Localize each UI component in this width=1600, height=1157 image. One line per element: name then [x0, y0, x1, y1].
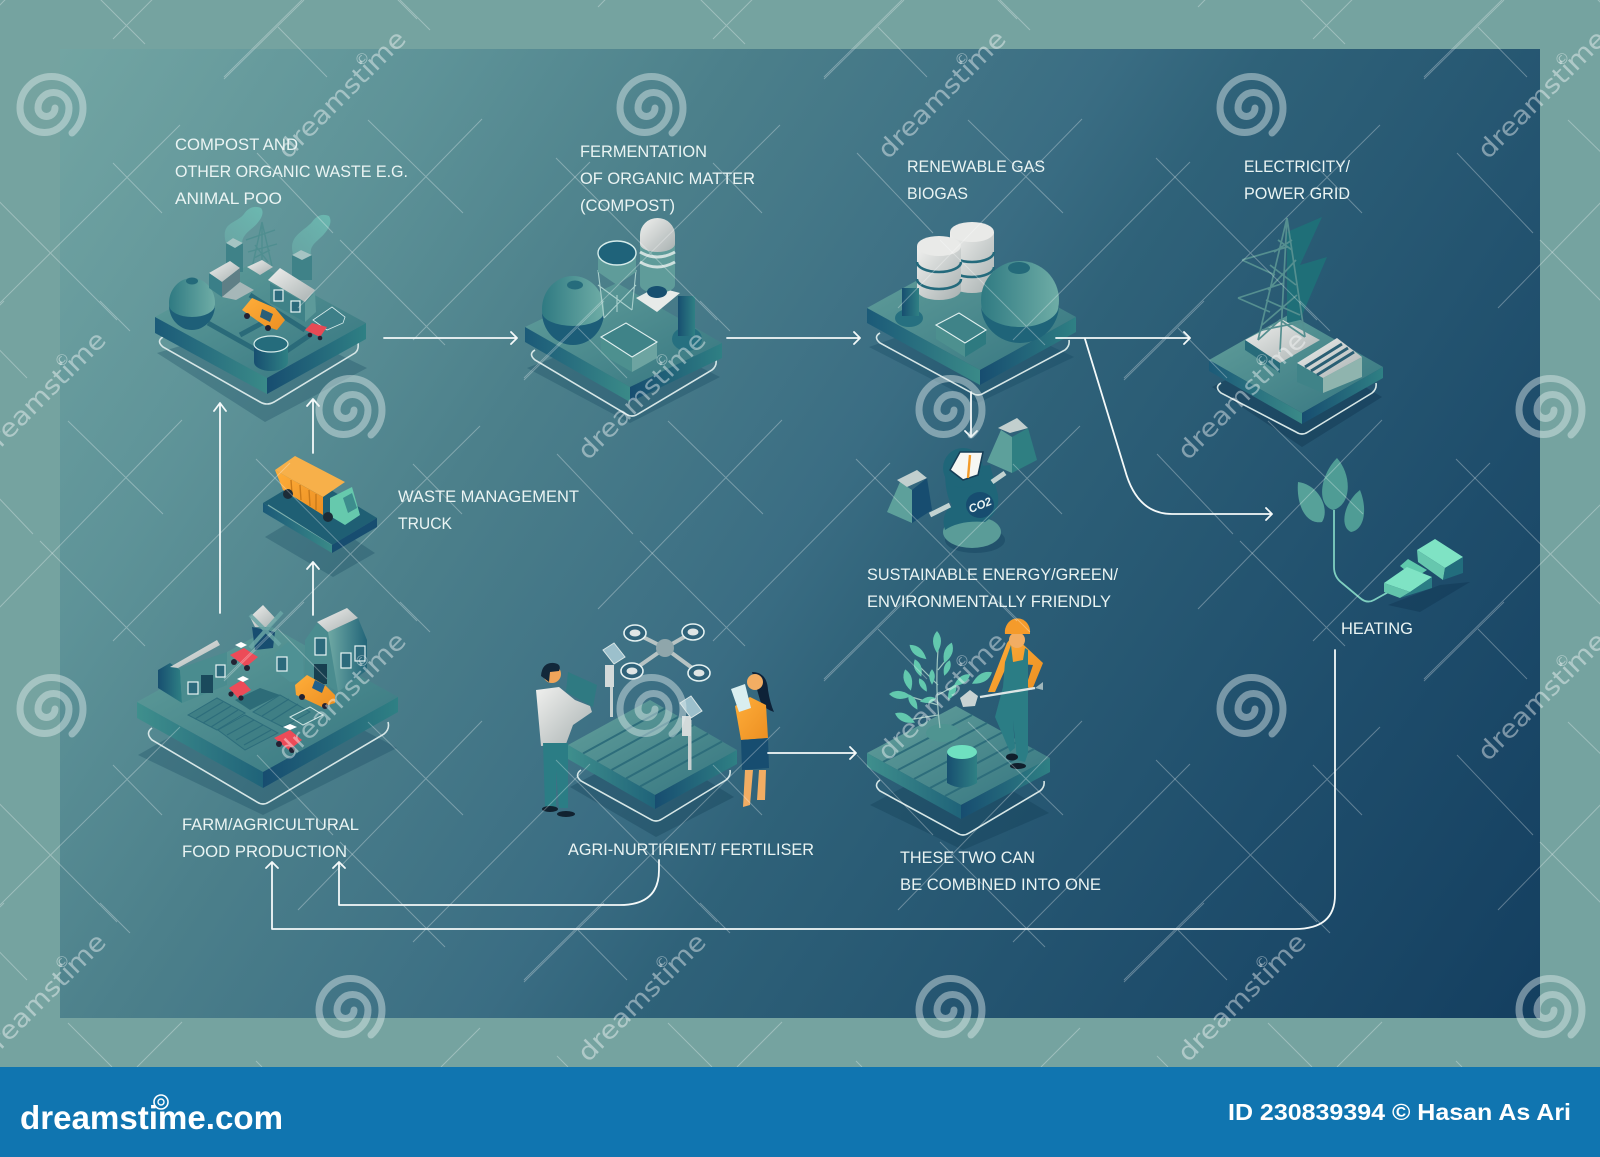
watermark text: ©: [1551, 47, 1574, 71]
module: power grid: [1209, 217, 1383, 447]
logo: dreamstime.com: dreamstime.com: [20, 1099, 283, 1136]
module: renewable biogas storage: [867, 222, 1076, 403]
label: farm: FOOD PRODUCTION: [182, 843, 347, 861]
label: biogas: [907, 158, 1045, 203]
arrow: truck to compost: [307, 399, 319, 453]
label: fertiliser: AGRI-NURTIRIENT/ FERTILISER: [568, 841, 814, 859]
icon: worker with shovel: [960, 618, 1043, 769]
module: agri-nutrient drone deck: [536, 624, 774, 837]
label: combined: THESE TWO CAN: [900, 849, 1035, 867]
watermark text: dreamstime: [1472, 24, 1600, 164]
arrow: heating to food production: [266, 650, 1335, 929]
label: fermentation: FERMENTATION: [580, 143, 707, 161]
icon: CO2 badge: CO2: [967, 496, 994, 516]
icon: bucket: [947, 745, 977, 788]
icon: man with tablet: [536, 663, 597, 817]
watermark text: dreamstime: [872, 24, 1012, 164]
label: sustainable energy: SUSTAINABLE ENERGY/GREEN/: [867, 566, 1118, 584]
label: farm: [182, 816, 359, 861]
watermark text: ©: [951, 649, 974, 673]
module: waste truck: [263, 456, 377, 577]
watermark text: ©: [951, 47, 974, 71]
icon: hopper on frame: [598, 241, 636, 318]
arrow: drone deck to planting: [768, 747, 856, 759]
watermark text: dreamstime: [1472, 626, 1600, 766]
icon: gauge base: [930, 465, 1005, 548]
icon: left block: [887, 470, 932, 523]
icon: silo: [636, 218, 680, 312]
label: combined: BE COMBINED INTO ONE: [900, 876, 1101, 894]
icon: drone: [621, 624, 710, 681]
label: fermentation: (COMPOST): [580, 197, 675, 215]
icon: small utility box: [209, 261, 254, 300]
credit line: ID 230839394 © Hasan As Ari: [1228, 1099, 1571, 1125]
arrow: biogas to grid: [1056, 332, 1190, 344]
icon: sphere digester: [542, 276, 604, 345]
icon: orange pickup: [295, 675, 335, 709]
watermark text: ©: [1251, 950, 1274, 974]
icon: farmhouse: [268, 268, 316, 322]
arrow: compost to fermentation: [384, 332, 517, 344]
module: planting deck with worker: [867, 618, 1050, 850]
footer bar: [0, 1067, 1600, 1157]
icon: gauge dial: [943, 448, 983, 488]
label: electricity: [1244, 158, 1350, 203]
icon: rear gas cylinder: [950, 222, 994, 293]
icon: main farmhouse: [275, 608, 367, 692]
watermark text: ©: [1251, 348, 1274, 372]
arrow: farm to truck: [307, 562, 319, 615]
label: compost: COMPOST AND: [175, 136, 298, 154]
icon: van and red car: [305, 307, 345, 340]
label: combined: [900, 849, 1101, 894]
arrow: farm to compost: [214, 403, 226, 613]
label: heating: HEATING: [1341, 620, 1413, 638]
watermark text: dreamstime: [1172, 325, 1312, 465]
label: compost: OTHER ORGANIC WASTE E.G.: [175, 163, 408, 181]
label: biogas: BIOGAS: [907, 185, 968, 203]
label: waste truck: WASTE MANAGEMENT: [398, 488, 579, 506]
module: CO2 gauge and turbines: [887, 418, 1037, 553]
icon: transformer box: [1297, 338, 1362, 393]
module: fermentation plant: [525, 218, 722, 423]
label: waste truck: [398, 488, 579, 533]
icon: smoke and chimneys: [225, 207, 330, 280]
icon: solar sensor left: [603, 643, 625, 717]
icon: column: [895, 288, 923, 327]
label: electricity: ELECTRICITY/: [1244, 158, 1350, 176]
watermark text: ©: [651, 950, 674, 974]
label: biogas: RENEWABLE GAS: [907, 158, 1045, 176]
module: farm: [137, 605, 398, 815]
watermark text: dreamstime: [572, 927, 712, 1067]
watermark text: ©: [351, 47, 374, 71]
label: fermentation: [580, 143, 755, 215]
icon: cylinder tank: [254, 336, 288, 371]
main gradient panel: [60, 49, 1540, 1018]
label: compost: [175, 136, 408, 208]
icon: pylon shadow: [1287, 217, 1327, 323]
icon: storage sphere: [169, 278, 215, 330]
icon: pylon: [246, 222, 277, 275]
arrow: fermentation to biogas: [727, 332, 860, 344]
label: waste truck: TRUCK: [398, 515, 452, 533]
label: electricity: POWER GRID: [1244, 185, 1350, 203]
module: compost and organic waste site: [155, 207, 367, 422]
icon: sphere tank: [981, 261, 1059, 343]
watermark text: ©: [1551, 649, 1574, 673]
label: fermentation: OF ORGANIC MATTER: [580, 170, 755, 188]
icon: windmill: [250, 605, 282, 650]
icon: woman with clipboard: [731, 672, 774, 807]
watermark text: ©: [651, 348, 674, 372]
watermark text: ©: [351, 649, 374, 673]
icon: transmission pylon: [1238, 218, 1305, 352]
arrow: biogas to heating: [1085, 339, 1272, 520]
arrow: biogas to CO2: [965, 392, 977, 437]
watermark text: dreamstime: [272, 626, 412, 766]
icon: front gas cylinder: [917, 236, 961, 300]
icon: stacked box: [936, 313, 986, 357]
label: farm: FARM/AGRICULTURAL: [182, 816, 359, 834]
icon: solar sensor right: [680, 696, 702, 770]
icon: leaves and heating unit: [1298, 458, 1470, 612]
watermark text: dreamstime: [272, 24, 412, 164]
chart: field plots: [188, 688, 323, 750]
icon: column: [672, 296, 702, 351]
watermark text: dreamstime: [572, 325, 712, 465]
icon: grey pad: [1245, 320, 1320, 373]
icon: orange pickup truck: [242, 298, 285, 331]
label: compost: ANIMAL POO: [175, 190, 282, 208]
watermark text: ©: [51, 950, 74, 974]
watermark text: ©: [51, 348, 74, 372]
arrows: flow connectors: [214, 332, 1335, 929]
icon: long barn: [158, 640, 227, 703]
icon: right block: [987, 418, 1037, 473]
watermark text: dreamstime: [872, 626, 1012, 766]
icon: potted plant: [889, 631, 994, 742]
icon: red tractors: [228, 642, 302, 753]
arrow: fertiliser to food production: [333, 860, 659, 905]
icon: stacked box: [601, 323, 657, 372]
label: sustainable energy: ENVIRONMENTALLY FRIENDLY: [867, 593, 1111, 611]
label: sustainable energy: [867, 566, 1118, 611]
watermark text: dreamstime: [1172, 927, 1312, 1067]
